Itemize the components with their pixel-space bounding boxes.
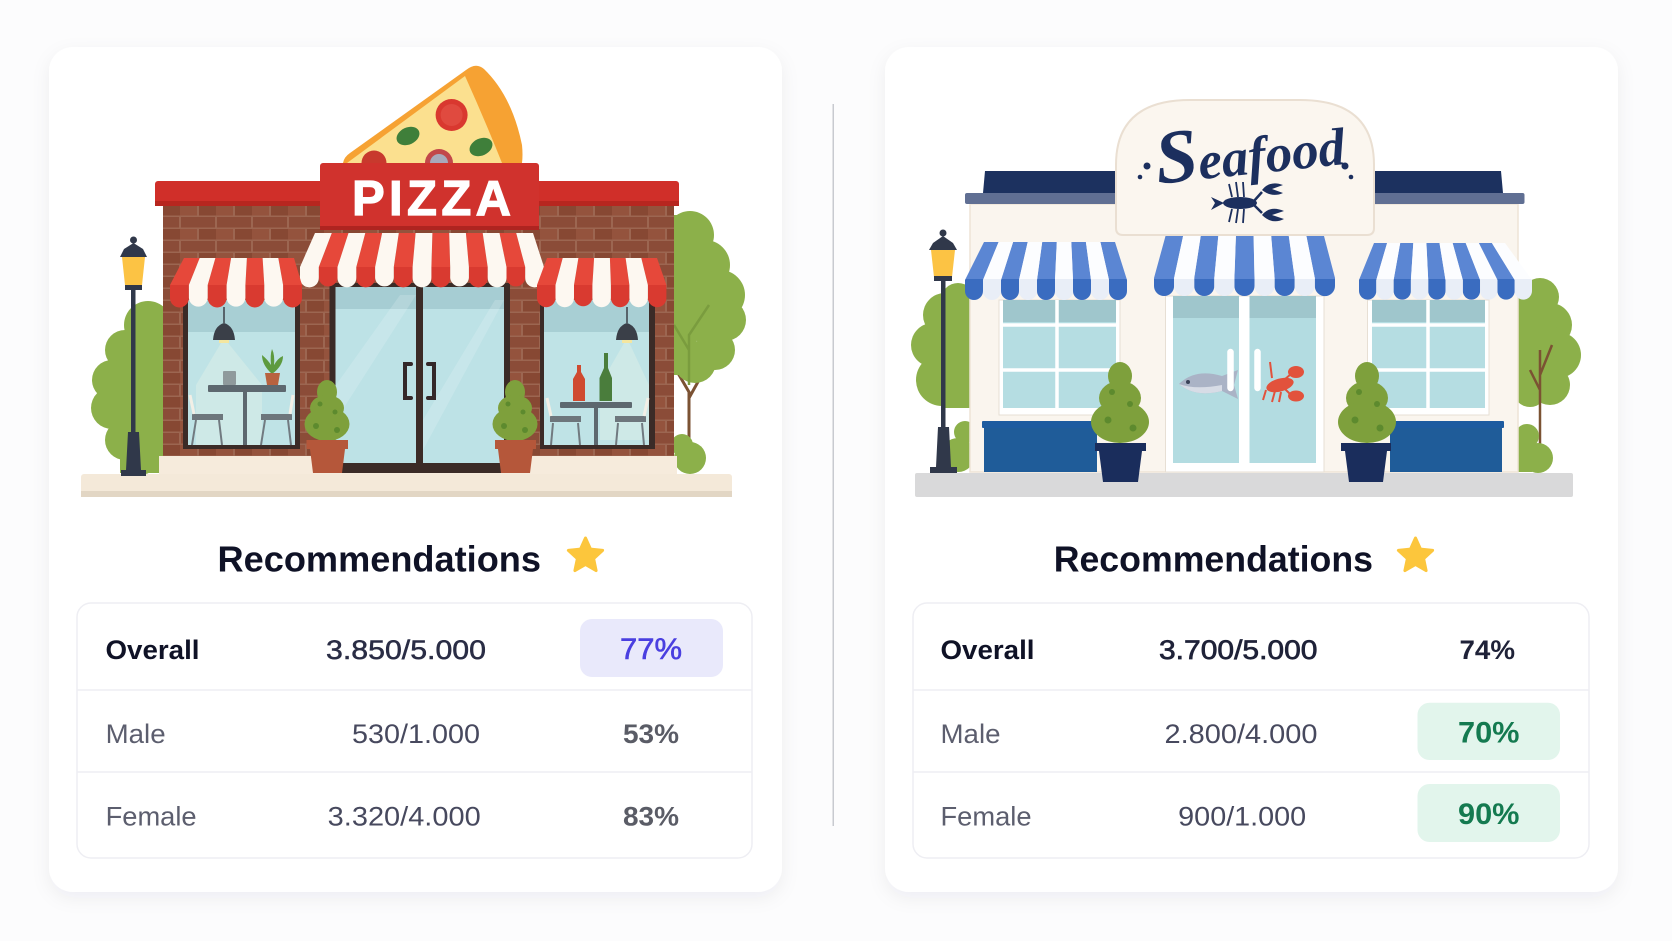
table: [560, 402, 632, 445]
center awning: [300, 233, 544, 287]
entrance doors: [1166, 296, 1324, 472]
row: male: Male: [940, 719, 1000, 749]
bottle: red: [573, 365, 585, 401]
door handles: [405, 364, 434, 398]
step: [159, 456, 677, 474]
potted plant: [262, 349, 283, 385]
pendant lamp: [213, 307, 235, 343]
row: female: 900/1.000: [1178, 802, 1306, 832]
bottle: green: [600, 353, 612, 401]
row: female: Female: [106, 802, 197, 832]
illustration: pizza storefront: [81, 66, 746, 497]
row: female: 90%: [1458, 798, 1520, 831]
left topiary: [1091, 362, 1149, 482]
center divider: [832, 104, 834, 826]
highlight chip: 70%: [1418, 703, 1560, 760]
row: overall: Overall: [940, 635, 1034, 665]
row: male: 2.800/4.000: [1164, 719, 1318, 749]
icon: fish: [1179, 370, 1238, 399]
center awning: [1154, 236, 1335, 296]
row: female: [940, 798, 1520, 832]
icon: red lobster: [1263, 362, 1304, 402]
row: male: [106, 719, 679, 749]
icon: left bush: [911, 283, 976, 472]
row: overall: Overall: [106, 635, 200, 665]
highlight chip: 90%: [1418, 784, 1560, 842]
icon: navy lobster: [1211, 182, 1284, 223]
right window: [1368, 300, 1489, 415]
icon: right tree: [1507, 278, 1581, 473]
row: male: 53%: [623, 719, 679, 749]
row: female: [106, 802, 679, 832]
right awning: [1359, 243, 1532, 300]
navy roof: [965, 171, 1524, 204]
chairs: [547, 398, 648, 445]
row: female: 83%: [623, 802, 679, 832]
sign: pizza: PIZZA: [352, 172, 511, 226]
row: male: [940, 717, 1520, 750]
building wall: [970, 204, 1518, 472]
row: overall: 74%: [1460, 635, 1515, 665]
left topiary: [304, 380, 350, 473]
street lamp: [929, 230, 957, 473]
row: female: 3.320/4.000: [328, 802, 481, 832]
right topiary: [1338, 362, 1396, 482]
icon: star: [568, 538, 603, 571]
row: overall: 77%: [620, 633, 682, 666]
row: overall: 3.850/5.000: [326, 635, 486, 665]
row: male: 530/1.000: [352, 719, 480, 749]
left awning: [965, 242, 1127, 300]
table: [208, 385, 286, 445]
sign: seafood: [1116, 97, 1374, 235]
left window: [999, 300, 1120, 415]
left blue planter: [982, 421, 1097, 472]
row: overall: 3.700/5.000: [1159, 635, 1318, 665]
icon: pizza slice: [343, 66, 522, 177]
sidewalk: [81, 474, 732, 497]
right blue planter: [1390, 421, 1504, 472]
sidewalk: [915, 473, 1573, 497]
brick wall: [163, 206, 674, 456]
left awning: [170, 258, 302, 307]
table: pizza recommendations: [77, 603, 752, 858]
door handles: [1230, 352, 1258, 388]
right awning: [537, 258, 666, 307]
row: male: Male: [106, 719, 166, 749]
icon: star: [1398, 538, 1433, 571]
row: female: Female: [940, 802, 1032, 832]
illustration: seafood storefront: [911, 97, 1581, 497]
highlight chip: 77%: [580, 619, 723, 677]
street lamp: [120, 236, 147, 476]
row: male: 70%: [1458, 717, 1520, 750]
panel: pizza restaurant: [49, 47, 782, 892]
card background: [49, 47, 782, 892]
red roof: [155, 181, 679, 206]
row: overall: [940, 635, 1515, 665]
icon: left bush: [91, 301, 174, 475]
chairs: [190, 395, 293, 445]
right topiary: [492, 380, 538, 473]
pendant lamp: [616, 307, 638, 343]
left window: [183, 300, 300, 449]
sign: seafood: Seafood: [1151, 97, 1350, 201]
table: seafood recommendations: [913, 603, 1589, 858]
icon: right tree: [661, 211, 746, 474]
heading: recommendations: Recommendations: [1054, 538, 1373, 580]
sign: pizza: [320, 163, 539, 230]
heading: recommendations: Recommendations: [218, 538, 541, 580]
entrance doors: [330, 283, 510, 473]
row: overall: [106, 633, 682, 666]
right window: [540, 300, 655, 449]
panel: seafood restaurant: [885, 47, 1618, 892]
glass on table: [223, 371, 236, 385]
card background: [885, 47, 1618, 892]
